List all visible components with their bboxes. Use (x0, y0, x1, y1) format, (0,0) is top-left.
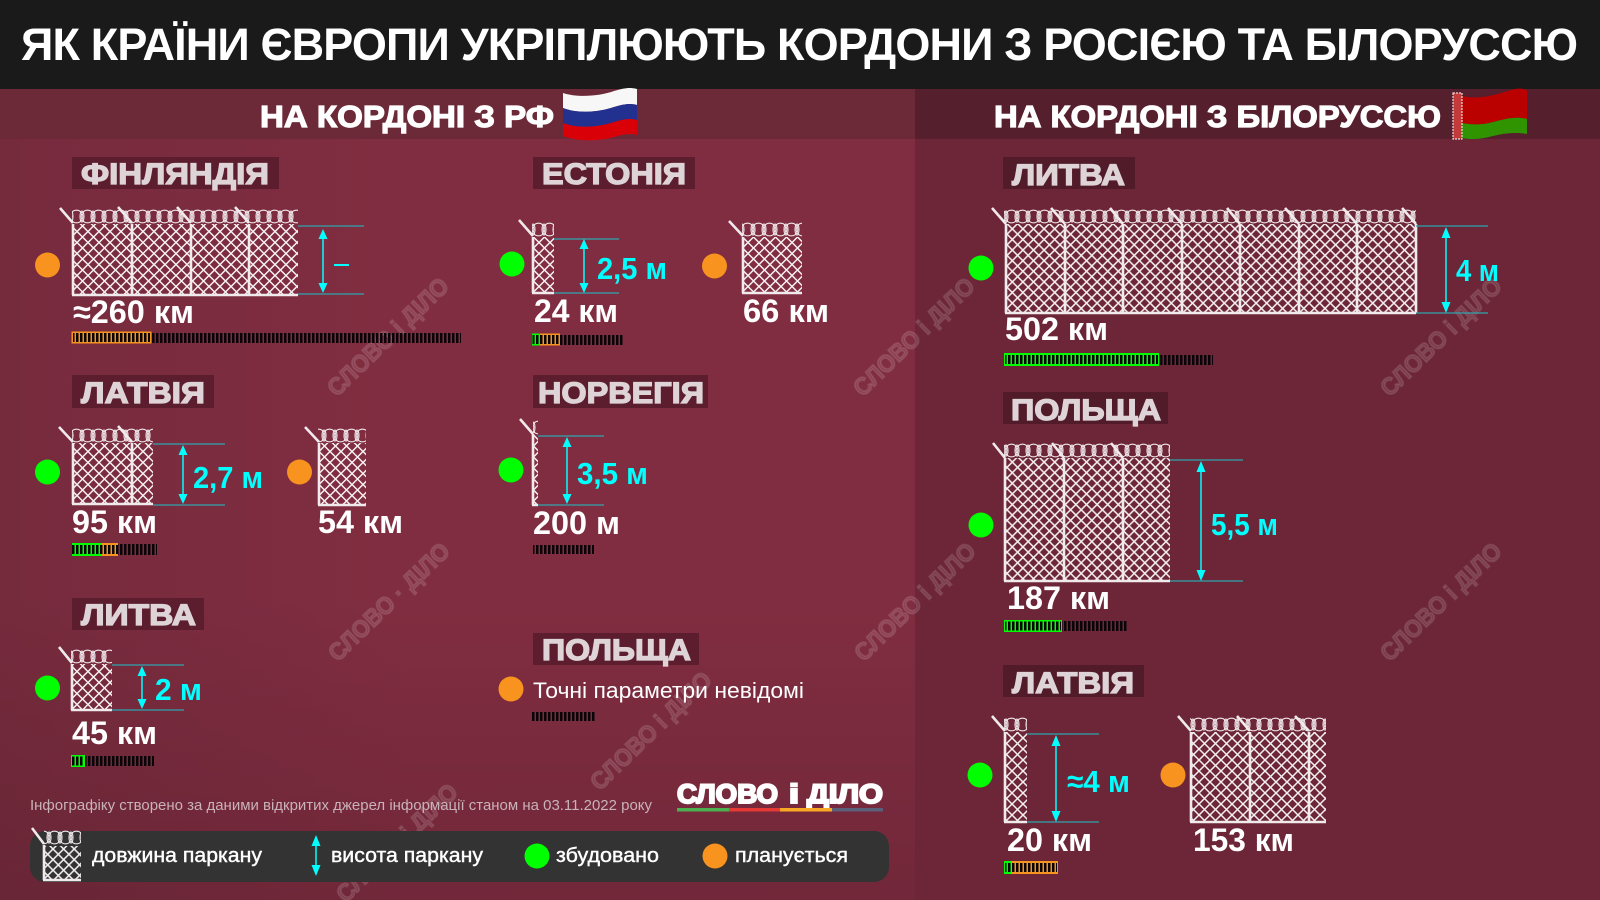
icon: green dot built (35, 460, 60, 484)
length bar (71, 332, 461, 344)
icon: Belarusian flag (1453, 89, 1527, 139)
length bar (71, 755, 154, 767)
icon: green dot built (35, 676, 60, 700)
icon: green dot built (968, 762, 992, 788)
height marker (112, 665, 184, 710)
icon: Russian flag (563, 88, 637, 140)
heading: Poland: ПОЛЬЩА (542, 634, 691, 667)
icon: green dot (524, 844, 550, 868)
logo: СЛОВО (677, 779, 778, 809)
heading: Lithuania: ЛИТВА (1012, 159, 1125, 192)
logo: ДІЛО (807, 779, 883, 809)
title: ЯК КРАЇНИ ЄВРОПИ УКРІПЛЮЮТЬ КОРДОНИ З РОСІЄЮ ТА БІЛОРУССЮ (21, 19, 1578, 70)
fence length: ≈260 км (73, 294, 194, 330)
length bar (72, 543, 157, 556)
length bar (1004, 620, 1128, 632)
watermarks: СЛОВО і ДІЛО (1375, 273, 1508, 402)
icon: fence (60, 207, 298, 295)
panel: left background (0, 89, 915, 900)
icon: green dot built (968, 256, 994, 280)
icon: fence 95 km (59, 426, 153, 504)
fence length: 45 км (72, 715, 157, 751)
panel: right background (915, 89, 1600, 900)
heading: border with Belarus: НА КОРДОНІ З БІЛОРУССЮ (994, 99, 1441, 134)
icon: orange dot (702, 844, 728, 868)
heading: Norway: НОРВЕГІЯ (538, 377, 704, 410)
band: left section header (0, 89, 915, 139)
icon: fence 66 km (729, 221, 802, 293)
height marker (298, 226, 364, 294)
panel: Latvia (Russia border) (35, 375, 403, 556)
length bar (1004, 861, 1058, 874)
height value: 5,5 м (1211, 507, 1278, 542)
icon: fence 502 km (992, 208, 1416, 313)
height value: 2,5 м (597, 251, 667, 286)
icon: orange dot planned (1160, 762, 1186, 788)
watermarks (322, 273, 1508, 900)
label: довжина паркану (92, 845, 262, 867)
heading: Lithuania: ЛИТВА (81, 599, 196, 632)
icon: orange dot planned (35, 252, 60, 278)
note: Точні параметри невідомі (533, 678, 804, 703)
fence length: 187 км (1007, 580, 1110, 616)
length bar (1004, 353, 1213, 366)
watermarks: СЛОВО і ДІЛО (848, 273, 981, 402)
icon: green dot built (968, 512, 994, 538)
legend (30, 828, 889, 882)
panel: Estonia (500, 157, 829, 346)
height marker (1416, 226, 1488, 313)
height marker (153, 444, 225, 505)
fence length: 153 км (1193, 822, 1294, 858)
panel: Norway (498, 375, 708, 554)
icon: orange dot planned (702, 254, 727, 278)
icon: height arrow (312, 835, 320, 876)
label: збудовано (556, 845, 659, 867)
icon: fence 24 km (519, 220, 554, 293)
source note: Інфографіку створено за даними відкритих джерел інформації станом на 03.11.2022 року (30, 797, 652, 814)
panel: Latvia (Belarus border) (968, 665, 1326, 874)
fence length: 66 км (743, 293, 829, 329)
height marker (554, 239, 619, 293)
title band (0, 0, 1600, 89)
logo (677, 779, 883, 812)
height value: 2 м (155, 672, 202, 707)
icon: green dot built (500, 252, 524, 276)
panel: Finland (35, 157, 461, 344)
label: планується (735, 845, 848, 867)
heading: Finland: ФІНЛЯНДІЯ (81, 158, 269, 191)
icon: orange dot planned (287, 460, 312, 484)
watermarks: СЛОВО і ДІЛО (322, 273, 455, 402)
heading: Estonia: ЕСТОНІЯ (542, 158, 686, 191)
heading: Latvia: ЛАТВІЯ (1012, 667, 1134, 700)
height value: 4 м (1456, 253, 1499, 288)
height value: ≈4 м (1067, 764, 1130, 799)
watermarks: СЛОВО · ДІЛО (323, 538, 456, 667)
logo: і (789, 779, 799, 809)
icon: fence length (32, 828, 81, 880)
fence length: 24 км (534, 293, 618, 329)
icon: fence 20 km (992, 716, 1027, 822)
watermarks: СЛОВО і ДІЛО (1375, 538, 1508, 667)
icon: fence 200 m (520, 419, 538, 505)
icon: fence 45 km (59, 647, 112, 710)
length bar (533, 545, 594, 554)
label: висота паркану (331, 845, 483, 867)
icon: orange dot planned (498, 676, 524, 702)
icon: fence 54 km (305, 427, 366, 505)
length bar (532, 712, 596, 721)
watermarks: СЛОВО і ДІЛО (849, 538, 982, 667)
icon: fence 187 km (993, 443, 1170, 581)
fence length: 95 км (72, 504, 157, 540)
heading: Latvia: ЛАТВІЯ (81, 377, 205, 410)
length bar (532, 334, 623, 346)
heading: border with Russia: НА КОРДОНІ З РФ (260, 99, 554, 134)
fence length: 20 км (1007, 822, 1092, 858)
panel: Lithuania (Russia border) (35, 598, 204, 767)
height marker (1027, 734, 1099, 822)
icon: green dot built (498, 458, 524, 482)
heading: Poland: ПОЛЬЩА (1011, 394, 1161, 427)
fence length: 502 км (1005, 311, 1108, 347)
band: right section header (915, 89, 1600, 139)
panel: Poland (Russia border) (498, 633, 804, 721)
height value: 3,5 м (577, 456, 648, 491)
watermarks: СЛОВО і ДІЛО (585, 667, 718, 796)
panel: Poland (Belarus border) (968, 392, 1278, 632)
height marker (1170, 460, 1243, 581)
icon: fence 153 km (1178, 716, 1326, 822)
fence length: 54 км (318, 504, 403, 540)
height value: 2,7 м (193, 460, 263, 495)
height marker (538, 436, 604, 505)
fence length: 200 м (533, 505, 620, 541)
panel: Lithuania (Belarus border) (968, 157, 1499, 366)
